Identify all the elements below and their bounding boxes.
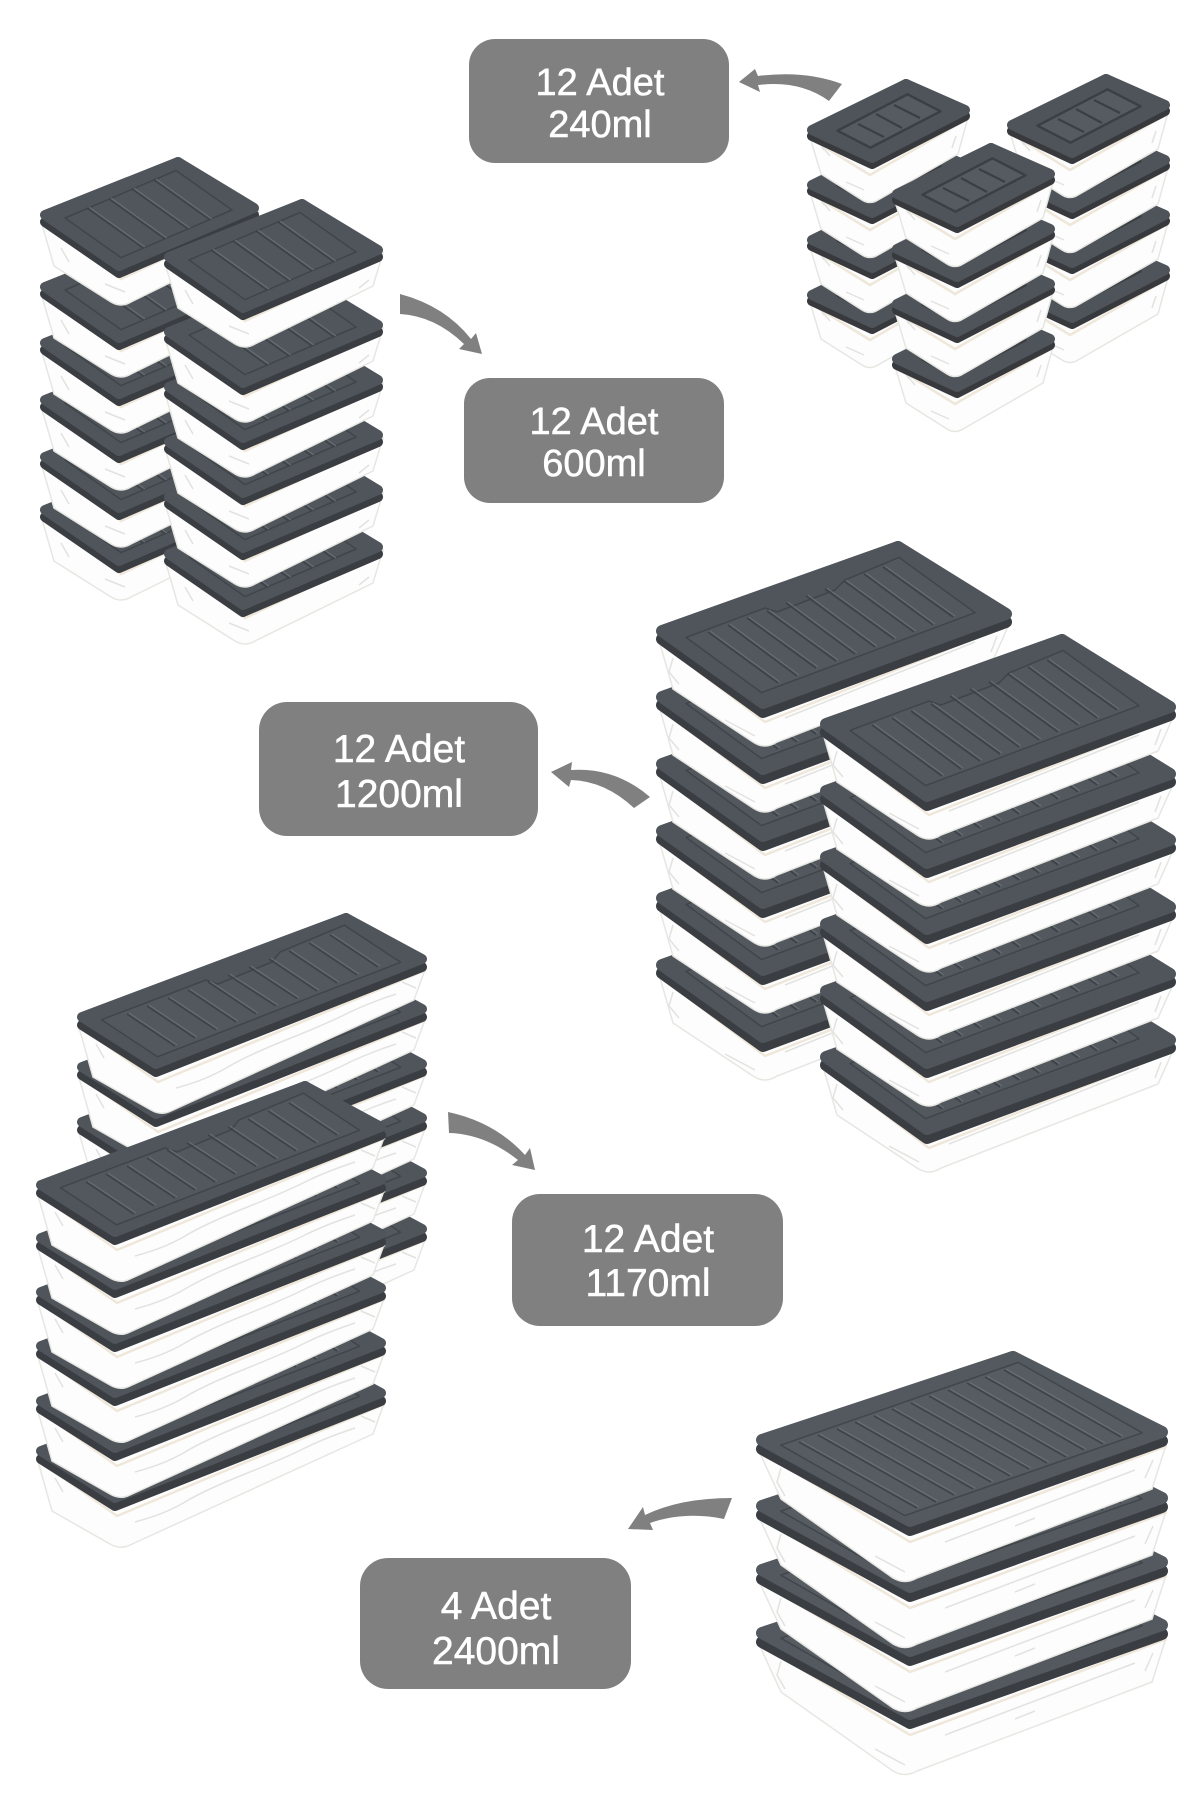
- callout: 4 Adet 2400ml: 4 Adet: [441, 1585, 551, 1628]
- container stack: 2400ml: [757, 1357, 1167, 1774]
- container stack: 600ml: [41, 162, 383, 644]
- callout: 4 Adet 2400ml: 2400ml: [432, 1630, 560, 1673]
- arrow: 240ml stack to callout: [739, 69, 842, 101]
- callout: 12 Adet 1170ml: 12 Adet: [582, 1218, 714, 1261]
- callout: 12 Adet 1200ml: 12 Adet: [333, 728, 465, 771]
- callout: 12 Adet 1170ml: [512, 1194, 783, 1326]
- callout: 12 Adet 240ml: 12 Adet: [536, 62, 665, 104]
- container stack: 1170ml: [37, 918, 426, 1547]
- callout: 12 Adet 240ml: [469, 39, 729, 163]
- callout: 12 Adet 1200ml: [259, 702, 538, 836]
- callout: 12 Adet 600ml: 600ml: [542, 443, 646, 485]
- callout: 12 Adet 1200ml: 1200ml: [335, 773, 463, 816]
- callout: 12 Adet 600ml: 12 Adet: [530, 401, 659, 443]
- arrow: 1200ml stack to callout: [551, 762, 650, 808]
- container stack: 1200ml: [658, 547, 1175, 1172]
- arrow: 1170ml stack to callout: [448, 1112, 535, 1170]
- container stack: 240ml: [809, 79, 1169, 432]
- callout: 12 Adet 240ml: 240ml: [548, 104, 652, 146]
- arrow: 600ml stack to callout: [400, 294, 482, 354]
- arrow: 2400ml stack to callout: [628, 1498, 732, 1530]
- callout: 12 Adet 600ml: [464, 378, 724, 503]
- callout: 4 Adet 2400ml: [360, 1558, 631, 1689]
- callout: 12 Adet 1170ml: 1170ml: [585, 1262, 711, 1305]
